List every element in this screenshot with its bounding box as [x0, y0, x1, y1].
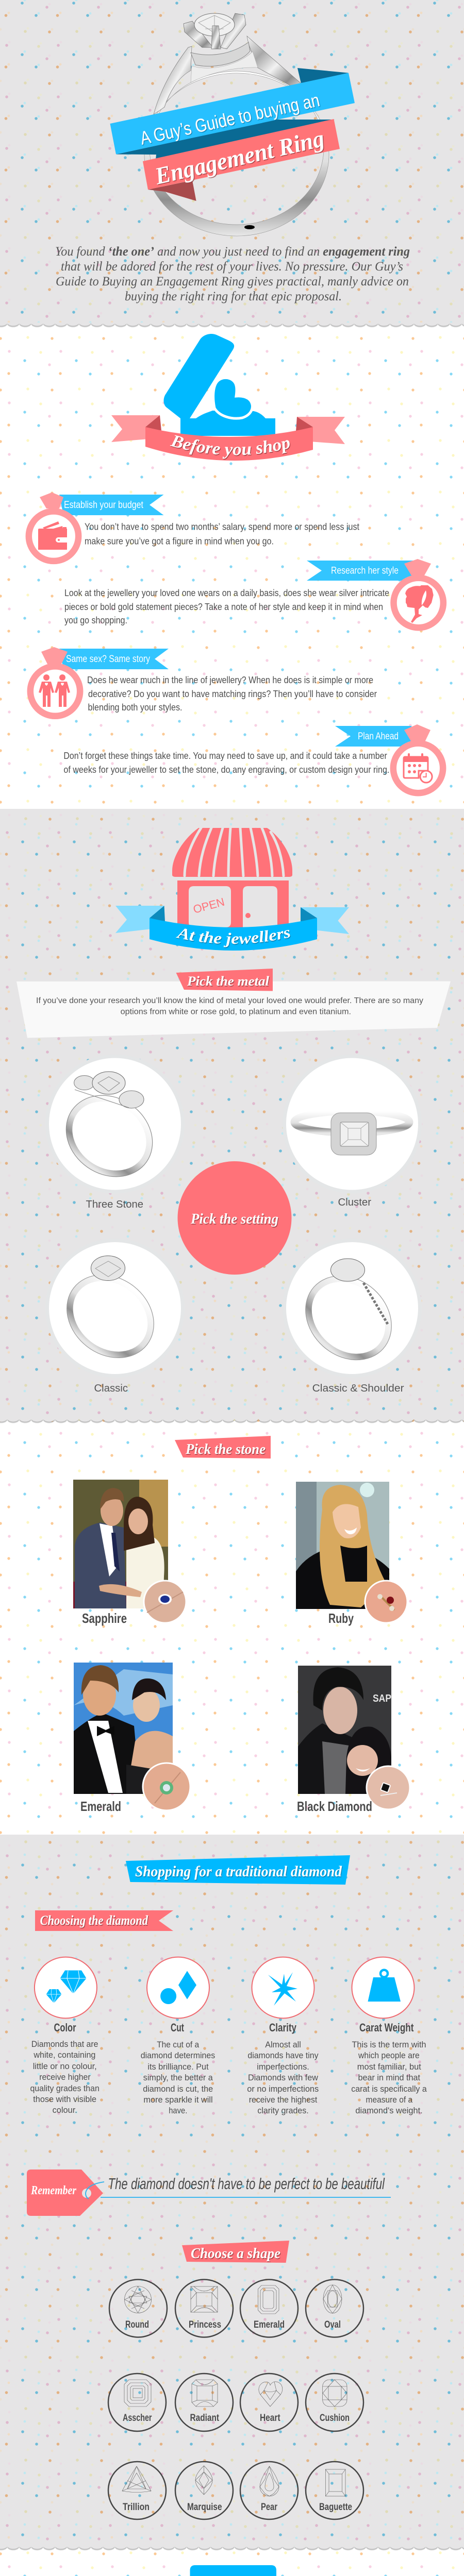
- label: Trillion: Trillion: [123, 2502, 150, 2513]
- photo: sapphire couple: [73, 1480, 186, 1626]
- icon: sparkle: [252, 1957, 314, 2018]
- text: same sex advice: blending both your styles.: [88, 702, 183, 713]
- text: budget advice: make sure you’ve got a figure in mind when you go.: [85, 536, 274, 546]
- banner: Same sex? Same story: Same sex? Same story: [66, 654, 150, 665]
- text: budget advice: You don’t have to spend two months’ salary, spend more or spend less just: [85, 521, 359, 532]
- text: same sex advice: decorative? Do you want to have matching rings? Then you’ll have to consider: [88, 688, 377, 699]
- text: metal advice: If you’ve done your research you’ll know the kind of metal your loved one would prefer. There are so many: [36, 996, 423, 1005]
- text: carat description: [351, 2040, 427, 2115]
- text: color description: white, containing: [33, 2050, 95, 2060]
- label: Three Stone: Three Stone: [86, 1199, 143, 1210]
- heading: Color: Color: [54, 2021, 76, 2034]
- icon: ring with two grooms: [30, 647, 80, 716]
- text: color description: [30, 2039, 100, 2115]
- icon: diamonds: [35, 1957, 97, 2018]
- text: color description: Diamonds that are: [31, 2039, 98, 2049]
- text: clarity description: Diamonds with few: [248, 2073, 319, 2082]
- label: Princess: Princess: [189, 2319, 221, 2330]
- setting: cluster ring: [285, 1056, 420, 1208]
- photo: ruby celebrity: [296, 1482, 407, 1626]
- tag: Shopping for a traditional diamond: [126, 1855, 350, 1885]
- text: budget advice: [85, 521, 359, 546]
- label: Heart: Heart: [260, 2413, 280, 2424]
- icon: ring with wallet: [29, 493, 78, 561]
- icon: ring with female profile: [394, 559, 443, 628]
- shape: round: [109, 2279, 167, 2337]
- heading: Pick the setting: [177, 1161, 292, 1275]
- callout: remember: [27, 2170, 391, 2216]
- text: color description: those with visible: [33, 2094, 96, 2104]
- panel: shopping for a traditional diamond: [0, 1835, 464, 2551]
- tag: Pick the stone: [175, 1436, 271, 1459]
- text: clarity description: receive the highest: [249, 2095, 318, 2105]
- shape: asscher: [108, 2374, 166, 2431]
- label: Black Diamond: Black Diamond: [297, 1799, 372, 1814]
- text: style advice: Look at the jewellery your loved one wears on a daily basis, does she wear silver intricate: [64, 587, 389, 598]
- item: same sex same story: [30, 647, 377, 716]
- label: Classic & Shoulder: Classic & Shoulder: [312, 1383, 404, 1394]
- text: style advice: [64, 587, 389, 625]
- banner: Plan Ahead: Plan Ahead: [358, 731, 399, 742]
- ribbon: Before you shop: Before you shop: [170, 435, 291, 460]
- text: cut description: diamond is cut, the: [143, 2084, 213, 2094]
- text: metal advice: [36, 996, 423, 1016]
- icon: weight: [352, 1957, 415, 2018]
- text: clarity description: [247, 2040, 319, 2115]
- label: Emerald: Emerald: [254, 2319, 285, 2330]
- photo: black diamond couple: SAP: [373, 1693, 391, 1704]
- text: style advice: pieces or bold gold statement pieces? Take a note of her style and keep it in mind when: [64, 601, 383, 612]
- text: cut description: [141, 2040, 215, 2115]
- label: Pear: Pear: [261, 2502, 277, 2513]
- setting: classic and shoulder ring: [285, 1241, 420, 1394]
- text: clarity description: imperfections.: [257, 2062, 309, 2072]
- ribbon: At the jewellers: At the jewellers: [176, 928, 291, 948]
- text: plan ahead advice: of weeks for your jeweller to set the stone, do any engraving, or custom design your ring.: [63, 764, 389, 775]
- label: Emerald: Emerald: [80, 1799, 121, 1814]
- banner: Establish your budget: Establish your budget: [64, 500, 144, 511]
- label: Sapphire: Sapphire: [82, 1611, 127, 1626]
- diamond fact: clarity: [247, 1957, 319, 2115]
- text: metal advice: options from white or rose gold, to platinum and even titanium.: [121, 1008, 351, 1016]
- shape: pear: [240, 2462, 298, 2519]
- label: Cluster: Cluster: [338, 1197, 371, 1208]
- label: Oval: Oval: [324, 2319, 341, 2330]
- inset: sapphire ring: [144, 1581, 186, 1623]
- shape: radiant: [175, 2374, 233, 2431]
- icon: cut shapes: [147, 1957, 209, 2018]
- shape: oval: [306, 2279, 363, 2337]
- tag: Pick the stone: Pick the stone: [185, 1442, 266, 1458]
- icon: jewellery store with open sign: OPEN: [192, 895, 226, 916]
- label: Radiant: Radiant: [190, 2413, 220, 2424]
- setting: classic ring: [47, 1241, 183, 1394]
- title ribbon: Engagement Ring: Engagement Ring: [152, 125, 327, 190]
- illustration: diamond engagement ring: [144, 13, 329, 236]
- title ribbon: A Guy's Guide to buying an: [110, 68, 355, 170]
- panel: pick the metal: [16, 969, 451, 1038]
- label: Classic: Classic: [94, 1383, 128, 1394]
- photo: black diamond couple: [297, 1666, 410, 1814]
- text: carat description: most familiar, but: [357, 2062, 421, 2072]
- item: research her style: [64, 559, 443, 628]
- banner: Same sex? Same story: [59, 649, 169, 669]
- text: cut description: have.: [169, 2106, 187, 2115]
- label: Ruby: Ruby: [328, 1611, 354, 1626]
- tag: Pick the metal: [176, 969, 273, 991]
- intro paragraph: Guide to Buying an Engagement Ring gives practical, manly advice on: [56, 275, 409, 289]
- panel: purchasing your ring: [190, 2565, 276, 2576]
- shape: trillion: [108, 2462, 166, 2519]
- intro paragraph: [55, 245, 410, 303]
- text: cut description: its brilliance. Put: [147, 2062, 209, 2072]
- panel: intro: [0, 0, 464, 328]
- item: plan ahead: [63, 724, 443, 793]
- tag: Choose a shape: [182, 2241, 289, 2263]
- icon: open ring box with heart: [164, 334, 275, 436]
- diamond fact: color: [30, 1957, 100, 2115]
- text: carat description: measure of a: [366, 2095, 413, 2105]
- heading: Cut: Cut: [171, 2021, 184, 2034]
- banner: Establish your budget: [59, 495, 164, 515]
- text: style advice: you go shopping.: [64, 615, 127, 625]
- icon: open ring box: [185, 2565, 281, 2576]
- shape: princess: [175, 2279, 233, 2337]
- ribbon: At the jewellers: [115, 906, 349, 951]
- label: Marquise: Marquise: [187, 2502, 222, 2513]
- tag: Choose a shape: Choose a shape: [191, 2246, 280, 2262]
- text: clarity description: Almost all: [265, 2040, 301, 2049]
- panel: before you shop: [26, 334, 446, 796]
- shape: cushion: [306, 2374, 363, 2431]
- label: Cushion: Cushion: [320, 2413, 350, 2424]
- tag: Pick the metal: Pick the metal: [187, 974, 270, 989]
- text: same sex advice: [87, 674, 377, 713]
- panel: pick the stone: [73, 1436, 410, 1814]
- inset: ruby ring: [365, 1581, 407, 1623]
- text: color description: colour.: [53, 2105, 77, 2115]
- item: establish your budget: [29, 493, 359, 561]
- text: color description: receive higher: [39, 2072, 91, 2082]
- intro paragraph: buying the right ring for that epic proposal.: [125, 290, 342, 303]
- banner: Research her style: Research her style: [331, 566, 399, 576]
- tag: Remember: Remember: [30, 2184, 77, 2197]
- inset: emerald ring: [143, 1763, 190, 1810]
- tag: Remember: [27, 2170, 104, 2216]
- label: Asscher: Asscher: [123, 2413, 152, 2424]
- title ribbon: A Guy's Guide to buying an: A Guy’s Guide to buying an: [138, 89, 322, 149]
- shape: baguette: [306, 2462, 363, 2519]
- icon: ring with calendar: [393, 724, 443, 793]
- intro paragraph: that will be adored for the rest of your lives. No pressure. Our Guy’s: [61, 260, 403, 274]
- diamond fact: cut: [141, 1957, 215, 2115]
- text: clarity description: or no imperfections: [247, 2084, 319, 2094]
- label: Round: Round: [125, 2319, 149, 2330]
- intro paragraph: You found ‘the one’ and now you just need to find an engagement ring: [55, 245, 410, 259]
- text: carat description: carat is specifically a: [351, 2084, 427, 2094]
- shape: marquise: [175, 2462, 233, 2519]
- heading: Pick the setting: Pick the setting: [190, 1211, 278, 1227]
- text: cut description: more sparkle it will: [143, 2095, 213, 2105]
- text: color description: quality grades than: [30, 2083, 100, 2093]
- text: carat description: bear in mind that: [358, 2073, 420, 2082]
- photo: emerald couple: [74, 1663, 190, 1814]
- banner: Choosing the diamond: Choosing the diamond: [40, 1913, 148, 1928]
- ribbon: Before you shop: [111, 415, 345, 461]
- banner: Plan Ahead: [335, 726, 418, 747]
- text: carat description: diamond's weight.: [355, 2106, 423, 2115]
- icon: jewellery store with open sign: [172, 828, 292, 927]
- banner: Choosing the diamond: [35, 1910, 173, 1931]
- shape: heart: [240, 2374, 298, 2431]
- text: clarity description: diamonds have tiny: [247, 2050, 319, 2060]
- label: Baguette: Baguette: [319, 2502, 352, 2513]
- setting: three stone ring: [47, 1056, 183, 1210]
- text: color description: little or no colour,: [33, 2061, 97, 2071]
- text: cut description: simply, the better a: [143, 2073, 213, 2082]
- text: plan ahead advice: [63, 750, 389, 775]
- heading: Clarity: Clarity: [269, 2021, 297, 2034]
- text: cut description: diamond determines: [141, 2050, 215, 2060]
- heading: Carat Weight: Carat Weight: [359, 2021, 414, 2034]
- text: carat description: This is the term with: [352, 2040, 426, 2049]
- diamond fact: carat weight: [351, 1957, 427, 2115]
- tag: Shopping for a traditional diamond: Shopping for a traditional diamond: [135, 1863, 342, 1880]
- text: carat description: which people are: [358, 2050, 420, 2060]
- banner: Research her style: [307, 561, 420, 581]
- inset: black diamond ring: [367, 1766, 410, 1809]
- text: same sex advice: Does he wear much in the line of jewellery? When he does is it simple or more: [87, 674, 373, 685]
- text: clarity description: clarity grades.: [257, 2106, 309, 2115]
- text: plan ahead advice: Don’t forget these things take time. You may need to save up, and it could take a number: [63, 750, 387, 761]
- panel: at the jewellers: [0, 809, 464, 1423]
- shape: emerald: [240, 2279, 298, 2337]
- text: cut description: The cut of a: [157, 2040, 200, 2049]
